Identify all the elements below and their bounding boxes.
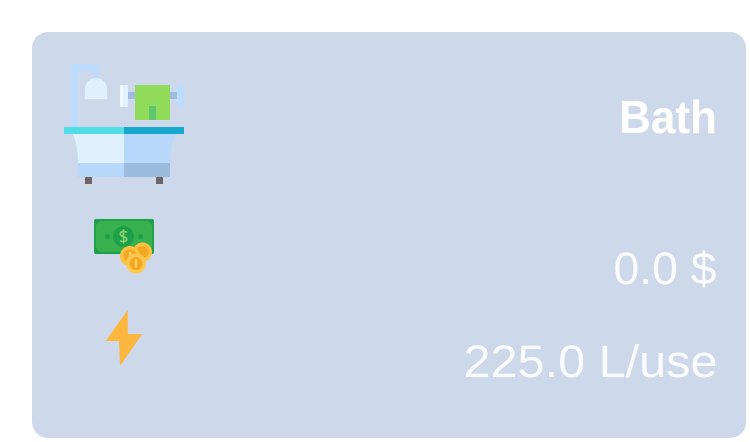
text: water use value: 225.0 L/use bbox=[464, 336, 718, 387]
icon: bathtub with shower and towel bbox=[64, 64, 184, 184]
heading: Bath: Bath bbox=[619, 91, 717, 143]
text: cost value: 0.0 $ bbox=[614, 243, 716, 294]
icon: banknote and coins bbox=[94, 219, 154, 274]
icon: lightning bolt bbox=[106, 310, 142, 366]
